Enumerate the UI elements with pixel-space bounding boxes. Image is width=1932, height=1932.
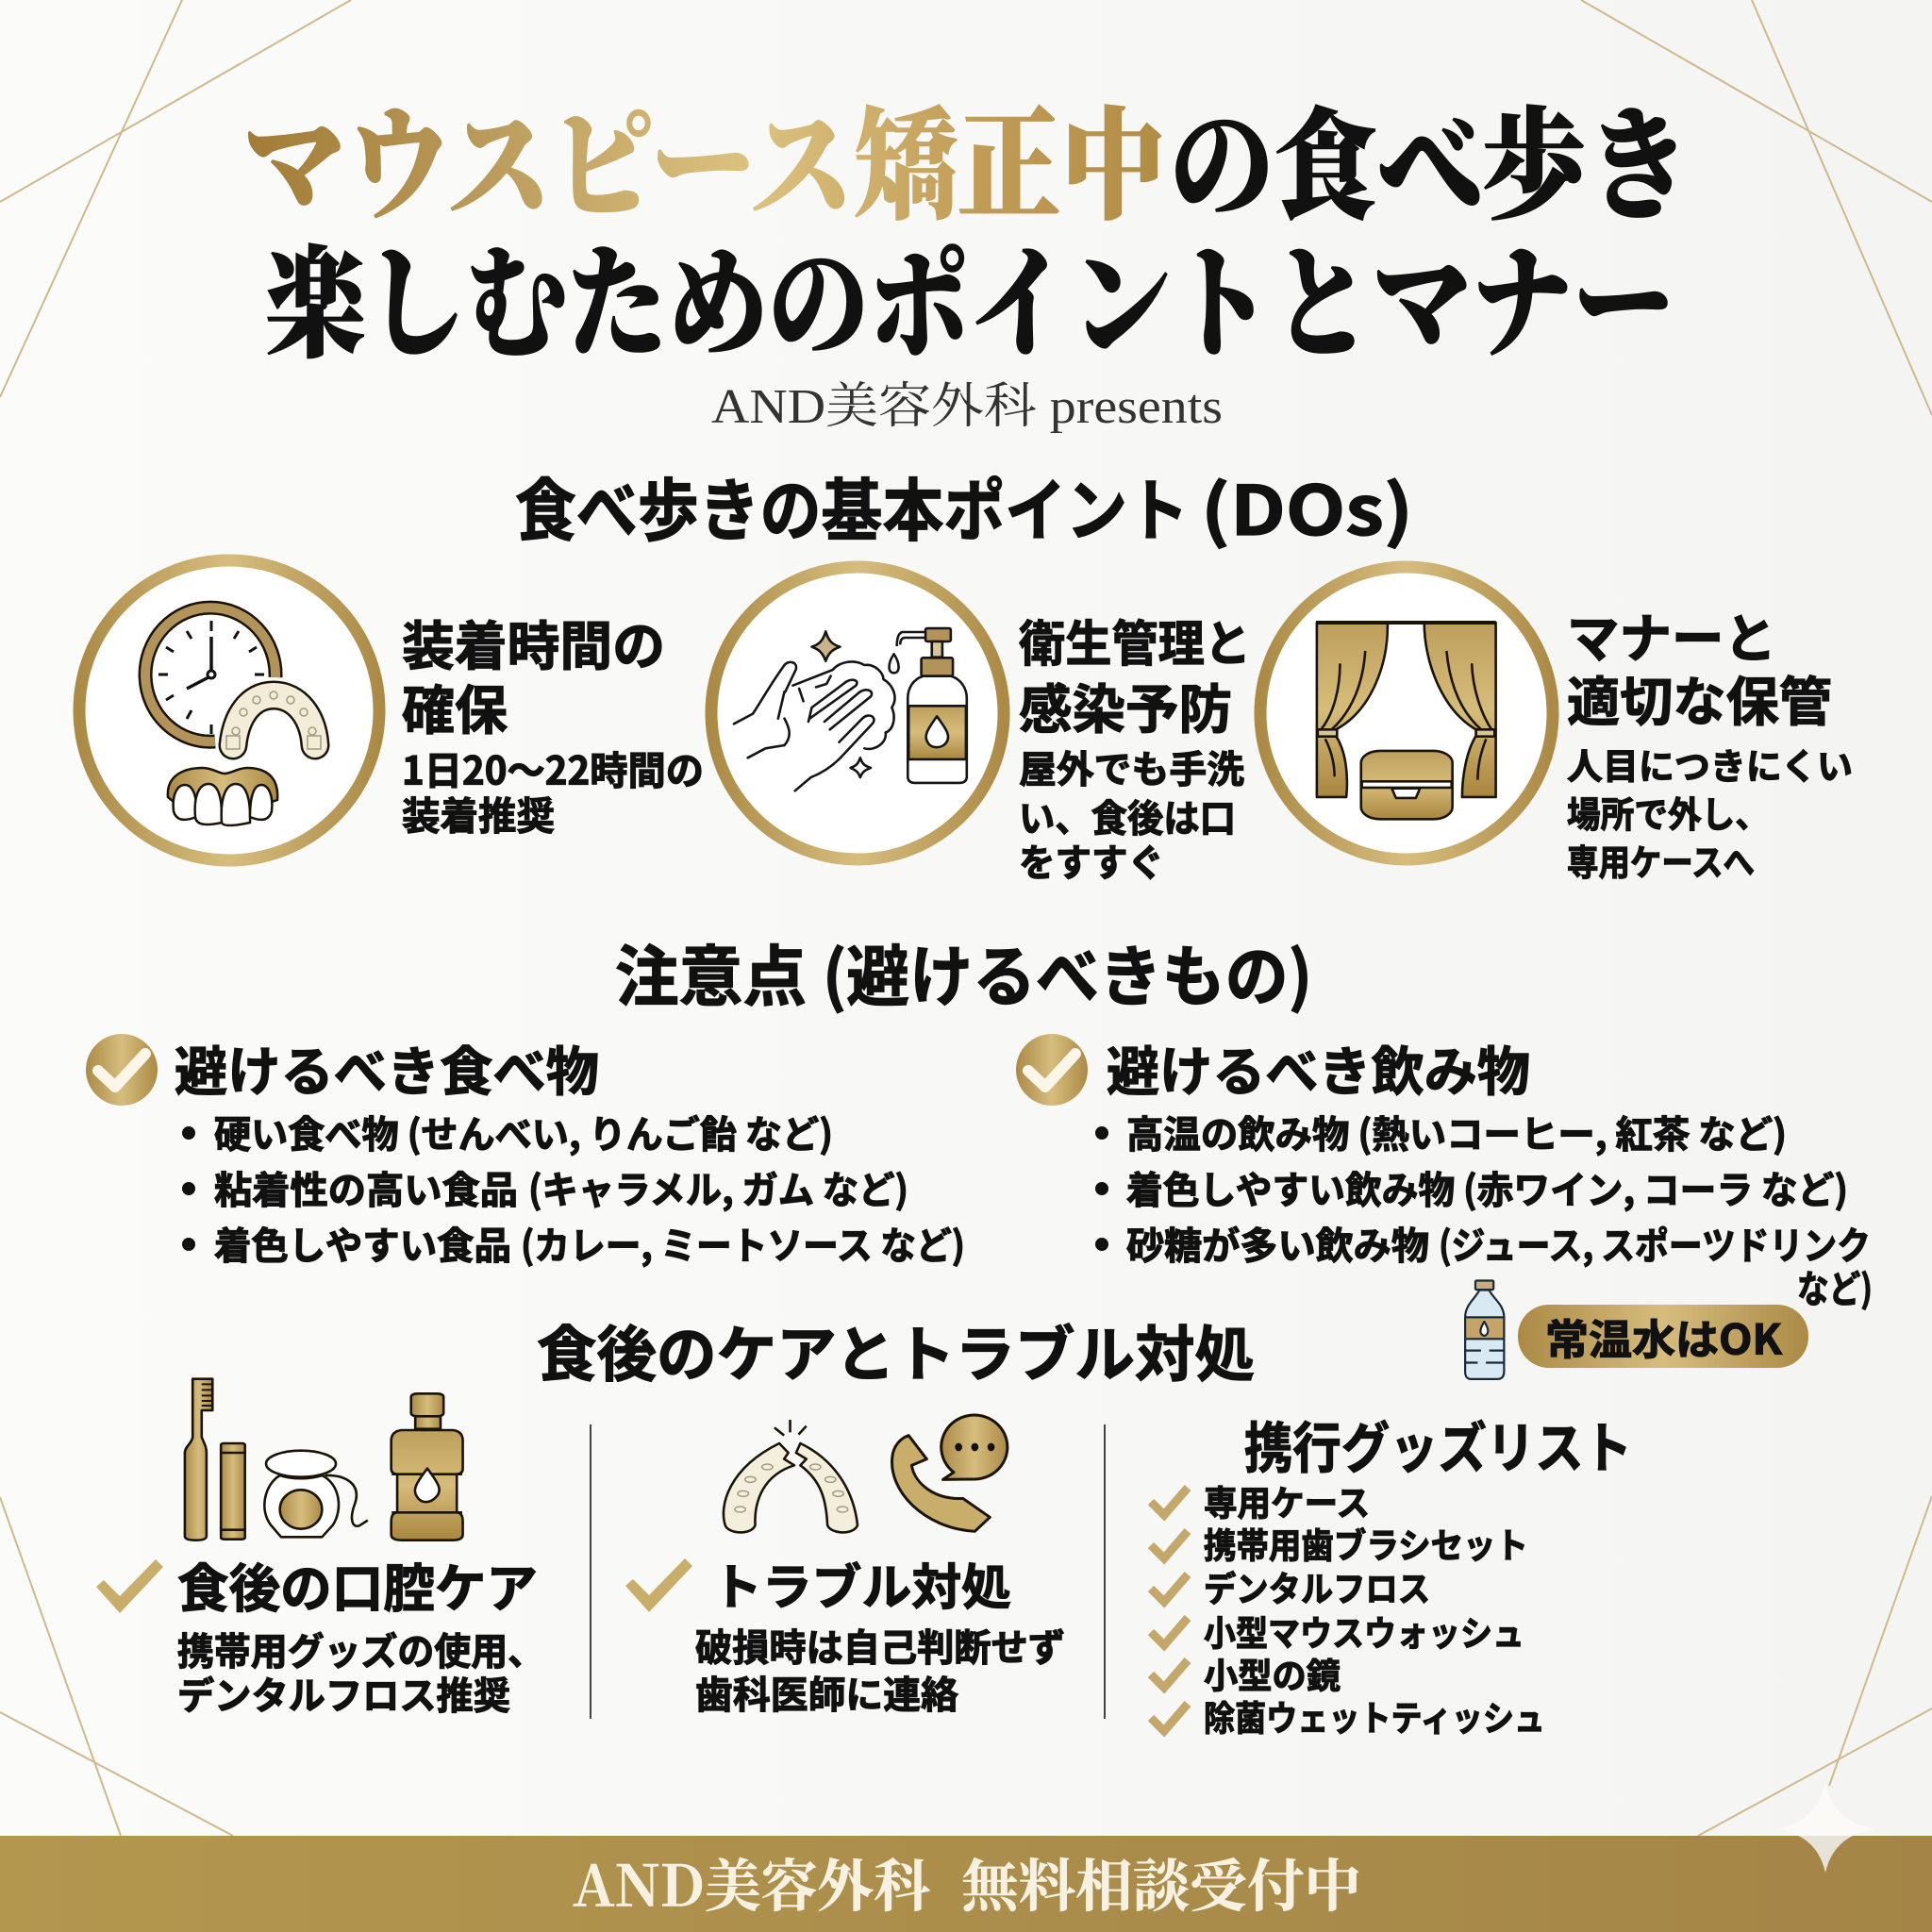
list: foods: (カレー, ミートソース など) bbox=[521, 1215, 965, 1270]
icon: clock, aligner and teeth bbox=[79, 560, 379, 860]
text: manners and storage bbox=[1567, 597, 1853, 886]
text: wearing time: 確保 bbox=[402, 669, 508, 745]
text: hygiene: 感染予防 bbox=[1019, 668, 1232, 744]
pill text: 常温水はOK bbox=[1545, 1306, 1783, 1366]
text: manners and storage: 適切な保管 bbox=[1567, 660, 1832, 737]
panel: hygiene bbox=[711, 567, 1251, 887]
list: drinks bbox=[1095, 1104, 1873, 1313]
text: wearing time bbox=[402, 605, 704, 841]
icon: hand washing and soap bottle bbox=[711, 567, 1004, 859]
text: wearing time: 装着時間の bbox=[402, 605, 665, 681]
list: drinks: 砂糖が多い飲み物 bbox=[1126, 1215, 1429, 1270]
footer text: 無料相談受付中 bbox=[961, 1841, 1361, 1923]
pill bbox=[1518, 1305, 1808, 1368]
text: trouble handling: 破損時は自己判断せず bbox=[695, 1617, 1065, 1672]
list: foods: (キャラメル, ガム など) bbox=[528, 1160, 908, 1215]
checklist: デンタルフロス bbox=[1204, 1560, 1430, 1611]
list: foods: 硬い食べ物 (せんべい, りんご飴 など) bbox=[214, 1104, 833, 1158]
list: foods: 着色しやすい食品 bbox=[214, 1215, 511, 1270]
text: manners and storage: 人目につきにくい bbox=[1567, 738, 1853, 790]
icon: water bottle bbox=[1465, 1280, 1504, 1379]
panel: foods to avoid bbox=[86, 1030, 965, 1270]
text: trouble handling: 歯科医師に連絡 bbox=[695, 1664, 958, 1719]
panel: drinks to avoid bbox=[1016, 1030, 1873, 1313]
subheading: foods: 避けるべき食べ物 bbox=[175, 1030, 599, 1107]
title: の食べ歩き bbox=[1170, 70, 1690, 243]
text: oral care: 携帯用グッズの使用、 bbox=[177, 1621, 544, 1675]
footer text: AND美容外科 bbox=[573, 1841, 930, 1923]
list: drinks: (ジュース, スポーツドリンク bbox=[1439, 1215, 1871, 1270]
list: foods: 粘着性の高い食品 bbox=[214, 1160, 518, 1215]
text: wearing time: 装着推奨 bbox=[402, 785, 555, 841]
text: trouble handling: トラブル対処 bbox=[712, 1548, 1011, 1619]
text: wearing time: 1日20〜22時間の bbox=[402, 740, 704, 796]
text: hygiene: 屋外でも手洗 bbox=[1019, 740, 1244, 794]
subheading: carry goods: 携行グッズリスト bbox=[1244, 1404, 1632, 1483]
text: hygiene bbox=[1019, 605, 1251, 887]
check mark bbox=[96, 1559, 163, 1613]
heading: DOs: 食べ歩きの基本ポイント bbox=[515, 456, 1189, 555]
panel: oral care bbox=[96, 1379, 544, 1721]
callout: room temperature water ok bbox=[1465, 1280, 1808, 1379]
checklist: 小型の鏡 bbox=[1204, 1647, 1341, 1698]
icon: check badge bbox=[1016, 1034, 1088, 1106]
check mark bbox=[625, 1558, 692, 1612]
subtitle: AND美容外科 presents bbox=[711, 380, 1223, 434]
text: oral care bbox=[177, 1547, 544, 1721]
title: 楽しむためのポイントとマナー bbox=[265, 208, 1674, 381]
text: manners and storage: マナーと bbox=[1567, 597, 1776, 674]
text: oral care: 食後の口腔ケア bbox=[177, 1547, 538, 1623]
title bbox=[242, 70, 1690, 381]
text: hygiene: い、食後は口 bbox=[1019, 789, 1236, 843]
footer band bbox=[0, 1836, 1932, 1932]
title: マウスピース矯正中 bbox=[242, 70, 1165, 243]
panel: trouble handling bbox=[625, 1415, 1065, 1719]
footer text bbox=[573, 1841, 1361, 1923]
heading: cautions: (避けるべきもの) bbox=[823, 924, 1312, 1020]
icon: check badge bbox=[86, 1034, 158, 1106]
heading: cautions bbox=[615, 924, 1312, 1020]
list: drinks: 高温の飲み物 (熱いコーヒー, 紅茶 など) bbox=[1126, 1104, 1787, 1158]
icon: broken aligner and phone bbox=[724, 1415, 1008, 1532]
checklist: 携帯用歯ブラシセット bbox=[1204, 1517, 1528, 1568]
text: manners and storage: 場所で外し、 bbox=[1567, 786, 1769, 838]
list: foods bbox=[182, 1104, 965, 1270]
sparkle bbox=[1776, 1779, 1875, 1873]
list: drinks: 着色しやすい飲み物 (赤ワイン, コーラ など) bbox=[1126, 1160, 1848, 1215]
text: oral care: デンタルフロス推奨 bbox=[177, 1666, 510, 1721]
subheading: drinks: 避けるべき飲み物 bbox=[1107, 1030, 1530, 1107]
text: trouble handling bbox=[695, 1548, 1065, 1719]
icon: oral care goods bbox=[185, 1379, 463, 1541]
icon: curtain and case bbox=[1260, 567, 1553, 859]
checklist: 専用ケース bbox=[1204, 1475, 1370, 1526]
heading: DOs: (DOs) bbox=[1201, 456, 1413, 555]
checklist: 除菌ウェットティッシュ bbox=[1204, 1690, 1545, 1741]
panel: wearing time bbox=[79, 560, 704, 860]
text: hygiene: 衛生管理と bbox=[1019, 605, 1251, 675]
text: manners and storage: 専用ケースへ bbox=[1567, 834, 1755, 886]
checklist: 小型マウスウォッシュ bbox=[1204, 1606, 1524, 1657]
heading: cautions: 注意点 bbox=[615, 924, 807, 1020]
text: hygiene: をすすぐ bbox=[1019, 832, 1164, 887]
panel: manners and storage bbox=[1260, 567, 1853, 886]
checklist bbox=[1151, 1475, 1545, 1741]
heading: aftercare: 食後のケアとトラブル対処 bbox=[537, 1307, 1255, 1394]
panel: carry goods list bbox=[1151, 1404, 1632, 1741]
list: drinks: など) bbox=[1797, 1258, 1873, 1313]
